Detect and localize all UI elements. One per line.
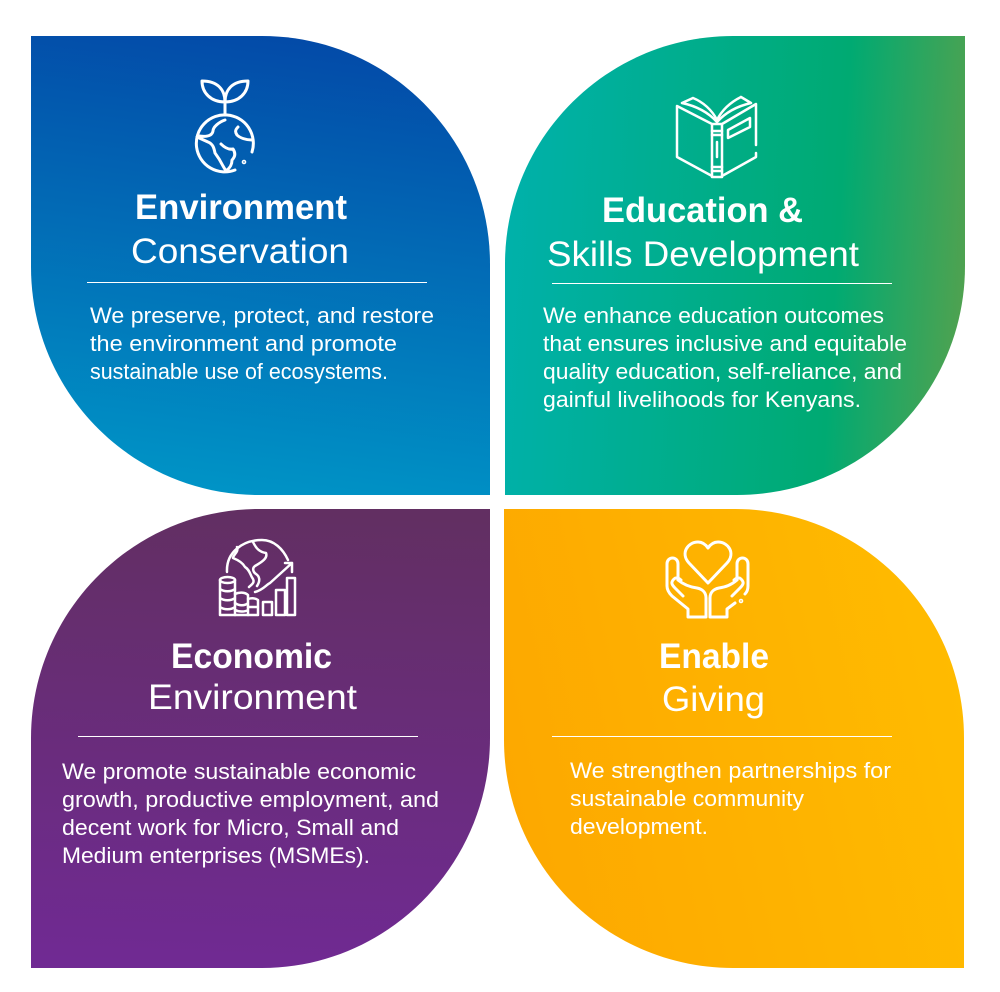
description: development. <box>570 814 708 839</box>
panel: Enable Giving <box>504 509 964 968</box>
icon: open book <box>677 97 756 177</box>
description: the environment and promote <box>90 331 397 356</box>
description: sustainable use of ecosystems. <box>90 359 388 384</box>
description <box>543 303 907 412</box>
panel background: green leaf <box>505 36 965 495</box>
divider <box>87 282 427 283</box>
icon: globe with sprout <box>196 81 253 172</box>
description: We preserve, protect, and restore <box>90 303 434 328</box>
subheading: Giving <box>662 680 765 719</box>
divider <box>552 283 892 284</box>
panel: Environment Conservation <box>31 36 490 495</box>
panel: Education & Skills Development <box>505 36 965 495</box>
subheading: Skills Development <box>547 235 859 274</box>
description: growth, productive employment, and <box>62 787 439 812</box>
panel background: purple leaf <box>31 509 490 968</box>
divider <box>552 736 892 737</box>
divider <box>78 736 418 737</box>
description: gainful livelihoods for Kenyans. <box>543 387 861 412</box>
description <box>90 303 434 384</box>
description: Medium enterprises (MSMEs). <box>62 843 370 868</box>
icon: globe, coins and growth chart <box>220 540 295 615</box>
heading: Economic <box>171 637 332 676</box>
description: We enhance education outcomes <box>543 303 884 328</box>
icon: hands holding heart <box>667 542 748 617</box>
heading: Enable <box>659 637 769 676</box>
description: that ensures inclusive and equitable <box>543 331 907 356</box>
panel background: blue leaf <box>31 36 490 495</box>
description: decent work for Micro, Small and <box>62 815 399 840</box>
description <box>570 758 892 839</box>
panel background: amber leaf <box>504 509 964 968</box>
description: sustainable community <box>570 786 805 811</box>
panel: Economic Environment <box>31 509 490 968</box>
heading: Environment <box>135 188 347 227</box>
description <box>62 759 439 868</box>
description: We promote sustainable economic <box>62 759 416 784</box>
subheading: Environment <box>148 678 357 717</box>
description: quality education, self-reliance, and <box>543 359 902 384</box>
description: We strengthen partnerships for <box>570 758 892 783</box>
heading: Education & <box>602 191 803 230</box>
subheading: Conservation <box>131 232 349 271</box>
